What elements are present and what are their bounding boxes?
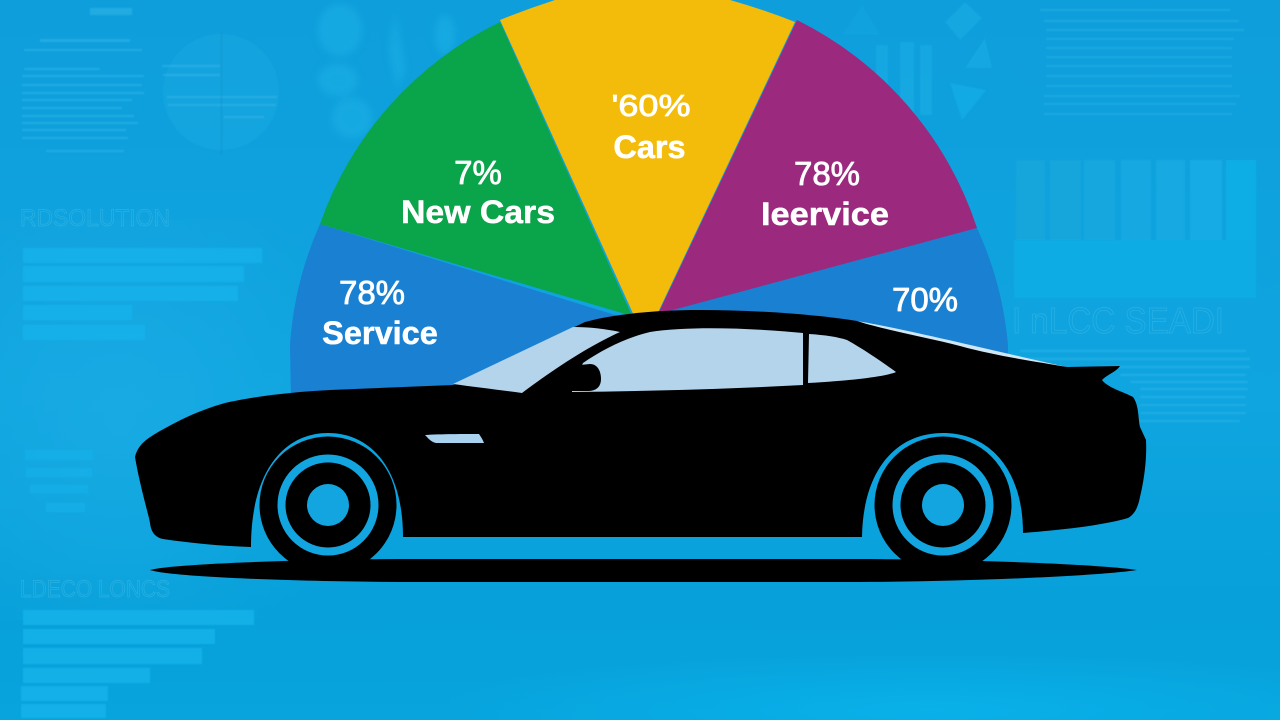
ghost shapes: top-right chart icons [842,2,992,127]
door handle [425,434,484,443]
ghost chart: top-left striped circle [162,32,279,154]
side mirror [540,364,601,391]
ghost shapes: top centre-left diamonds [318,4,455,138]
ghost panel: right text lines [1020,350,1250,422]
label: 78% service right: Ieervice [761,196,889,232]
ghost heading: right: I nLCC SEADI [1012,300,1224,341]
ghost bars: middle-left list [25,450,93,512]
front wheel [260,436,396,574]
background glow: left side [0,220,360,620]
ghost bar chart: right [1014,160,1256,298]
label: 7% new cars: 7% [454,154,502,191]
label: 7% new cars [401,154,555,230]
label: 78% service right [761,155,889,232]
background glow: bottom-right haze [450,620,1280,720]
label: 78% service right: 78% [794,155,860,192]
windshield [453,327,620,393]
label: 7% new cars: New Cars [401,194,555,230]
label: 70%: 70% [892,281,958,318]
label: 78% service left [322,274,438,351]
slice: purple [658,20,977,314]
ghost bars: lower-left list [21,610,254,718]
rear window [808,334,896,383]
slice: left blue [290,224,625,400]
label: 78% service left: Service [322,315,438,351]
ghost heading: resolution: RDSOLUTION [20,205,170,232]
pie chart [290,0,1008,400]
ghost bars: resolution list [23,248,262,340]
ghost panel: top-right text lines [1040,9,1244,115]
slice: green [320,22,632,316]
slice: right blue [660,228,1008,400]
rear wheel [874,436,1012,574]
car silhouette [135,310,1146,574]
label: 60% cars [612,88,690,165]
slice: yellow [500,0,795,340]
label: 60% cars: Cars [613,129,686,165]
car body [135,310,1146,547]
side window [572,328,803,392]
rear deck highlight [857,321,1067,367]
ground shadow [150,559,1137,582]
ghost heading: lower-left: LDECO LONCS [20,576,170,603]
ghost panel: top-left text block [22,8,144,152]
label: 78% service left: 78% [339,274,405,311]
label: 60% cars: '60% [612,88,690,123]
